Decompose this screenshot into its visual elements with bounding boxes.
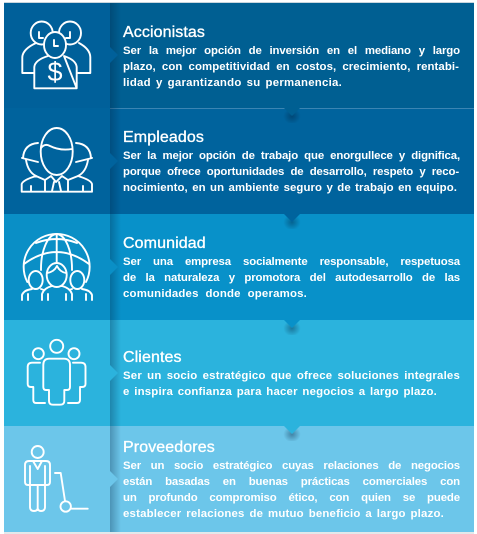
text block: Comunidad <box>123 235 460 300</box>
icon: comunidad globe with people <box>21 233 93 301</box>
text block: Accionistas: lidad y garantizando su permanencia. <box>123 77 342 89</box>
panel: Empleados <box>4 108 474 214</box>
text block: Comunidad: de la naturaleza y promotora del autodesarrollo de las <box>123 272 460 284</box>
bottom shadow <box>4 532 474 534</box>
icon: proveedores person with trolley <box>24 445 89 513</box>
icon: clientes three people <box>26 338 86 406</box>
text block: Accionistas <box>122 24 460 89</box>
text block: Proveedores: Proveedores <box>123 439 215 456</box>
panel: Accionistas <box>4 3 474 108</box>
text block: Empleados: porque ofrece oportunidades de desarrollo, respeto y reco- <box>123 166 459 178</box>
icon: accionistas with dollar sign <box>21 20 92 90</box>
text block: Comunidad: comunidades donde operamos. <box>123 288 307 300</box>
text block: Proveedores: establecer relaciones de mutuo beneficio a largo plazo. <box>123 508 444 520</box>
panel: Comunidad <box>4 214 474 320</box>
text block: Clientes <box>123 349 460 398</box>
icon: accionistas with dollar sign: $ <box>47 57 63 87</box>
panel: Proveedores <box>4 426 474 532</box>
icon: empleados with helmets <box>20 127 93 193</box>
text block: Comunidad: Ser una empresa socialmente responsable, respetuosa <box>123 256 460 268</box>
text block: Empleados: Empleados <box>123 129 204 146</box>
text block: Empleados: Ser la mejor opción de trabajo que enorgullece y dignifica, <box>123 150 460 162</box>
text block: Proveedores: están basadas en buenas prácticas comerciales con <box>123 476 460 488</box>
text block: Clientes: e inspira confianza para hacer negocios a largo plazo. <box>123 386 437 398</box>
text block: Proveedores: Ser un socio estratégico cuyas relaciones de negocios <box>123 460 460 472</box>
text block: Empleados <box>123 129 460 194</box>
text block: Clientes: Ser un socio estratégico que ofrece soluciones integrales <box>123 370 460 382</box>
text block: Accionistas: Accionistas <box>123 24 205 41</box>
text block: Clientes: Clientes <box>123 349 182 366</box>
text block: Proveedores: un profundo compromiso ético, con quien se puede <box>123 492 460 504</box>
text block: Empleados: nocimiento, en un ambiente seguro y de trabajo en equipo. <box>123 182 457 194</box>
panel: Clientes <box>4 320 474 426</box>
text block: Accionistas: Ser la mejor opción de inversión en el mediano y largo <box>123 45 460 57</box>
text block: Proveedores <box>123 439 460 520</box>
top edge line <box>4 2 474 3</box>
text block: Accionistas: plazo, con competitividad en costos, crecimiento, rentabi- <box>123 61 459 73</box>
text block: Comunidad: Comunidad <box>123 235 206 252</box>
